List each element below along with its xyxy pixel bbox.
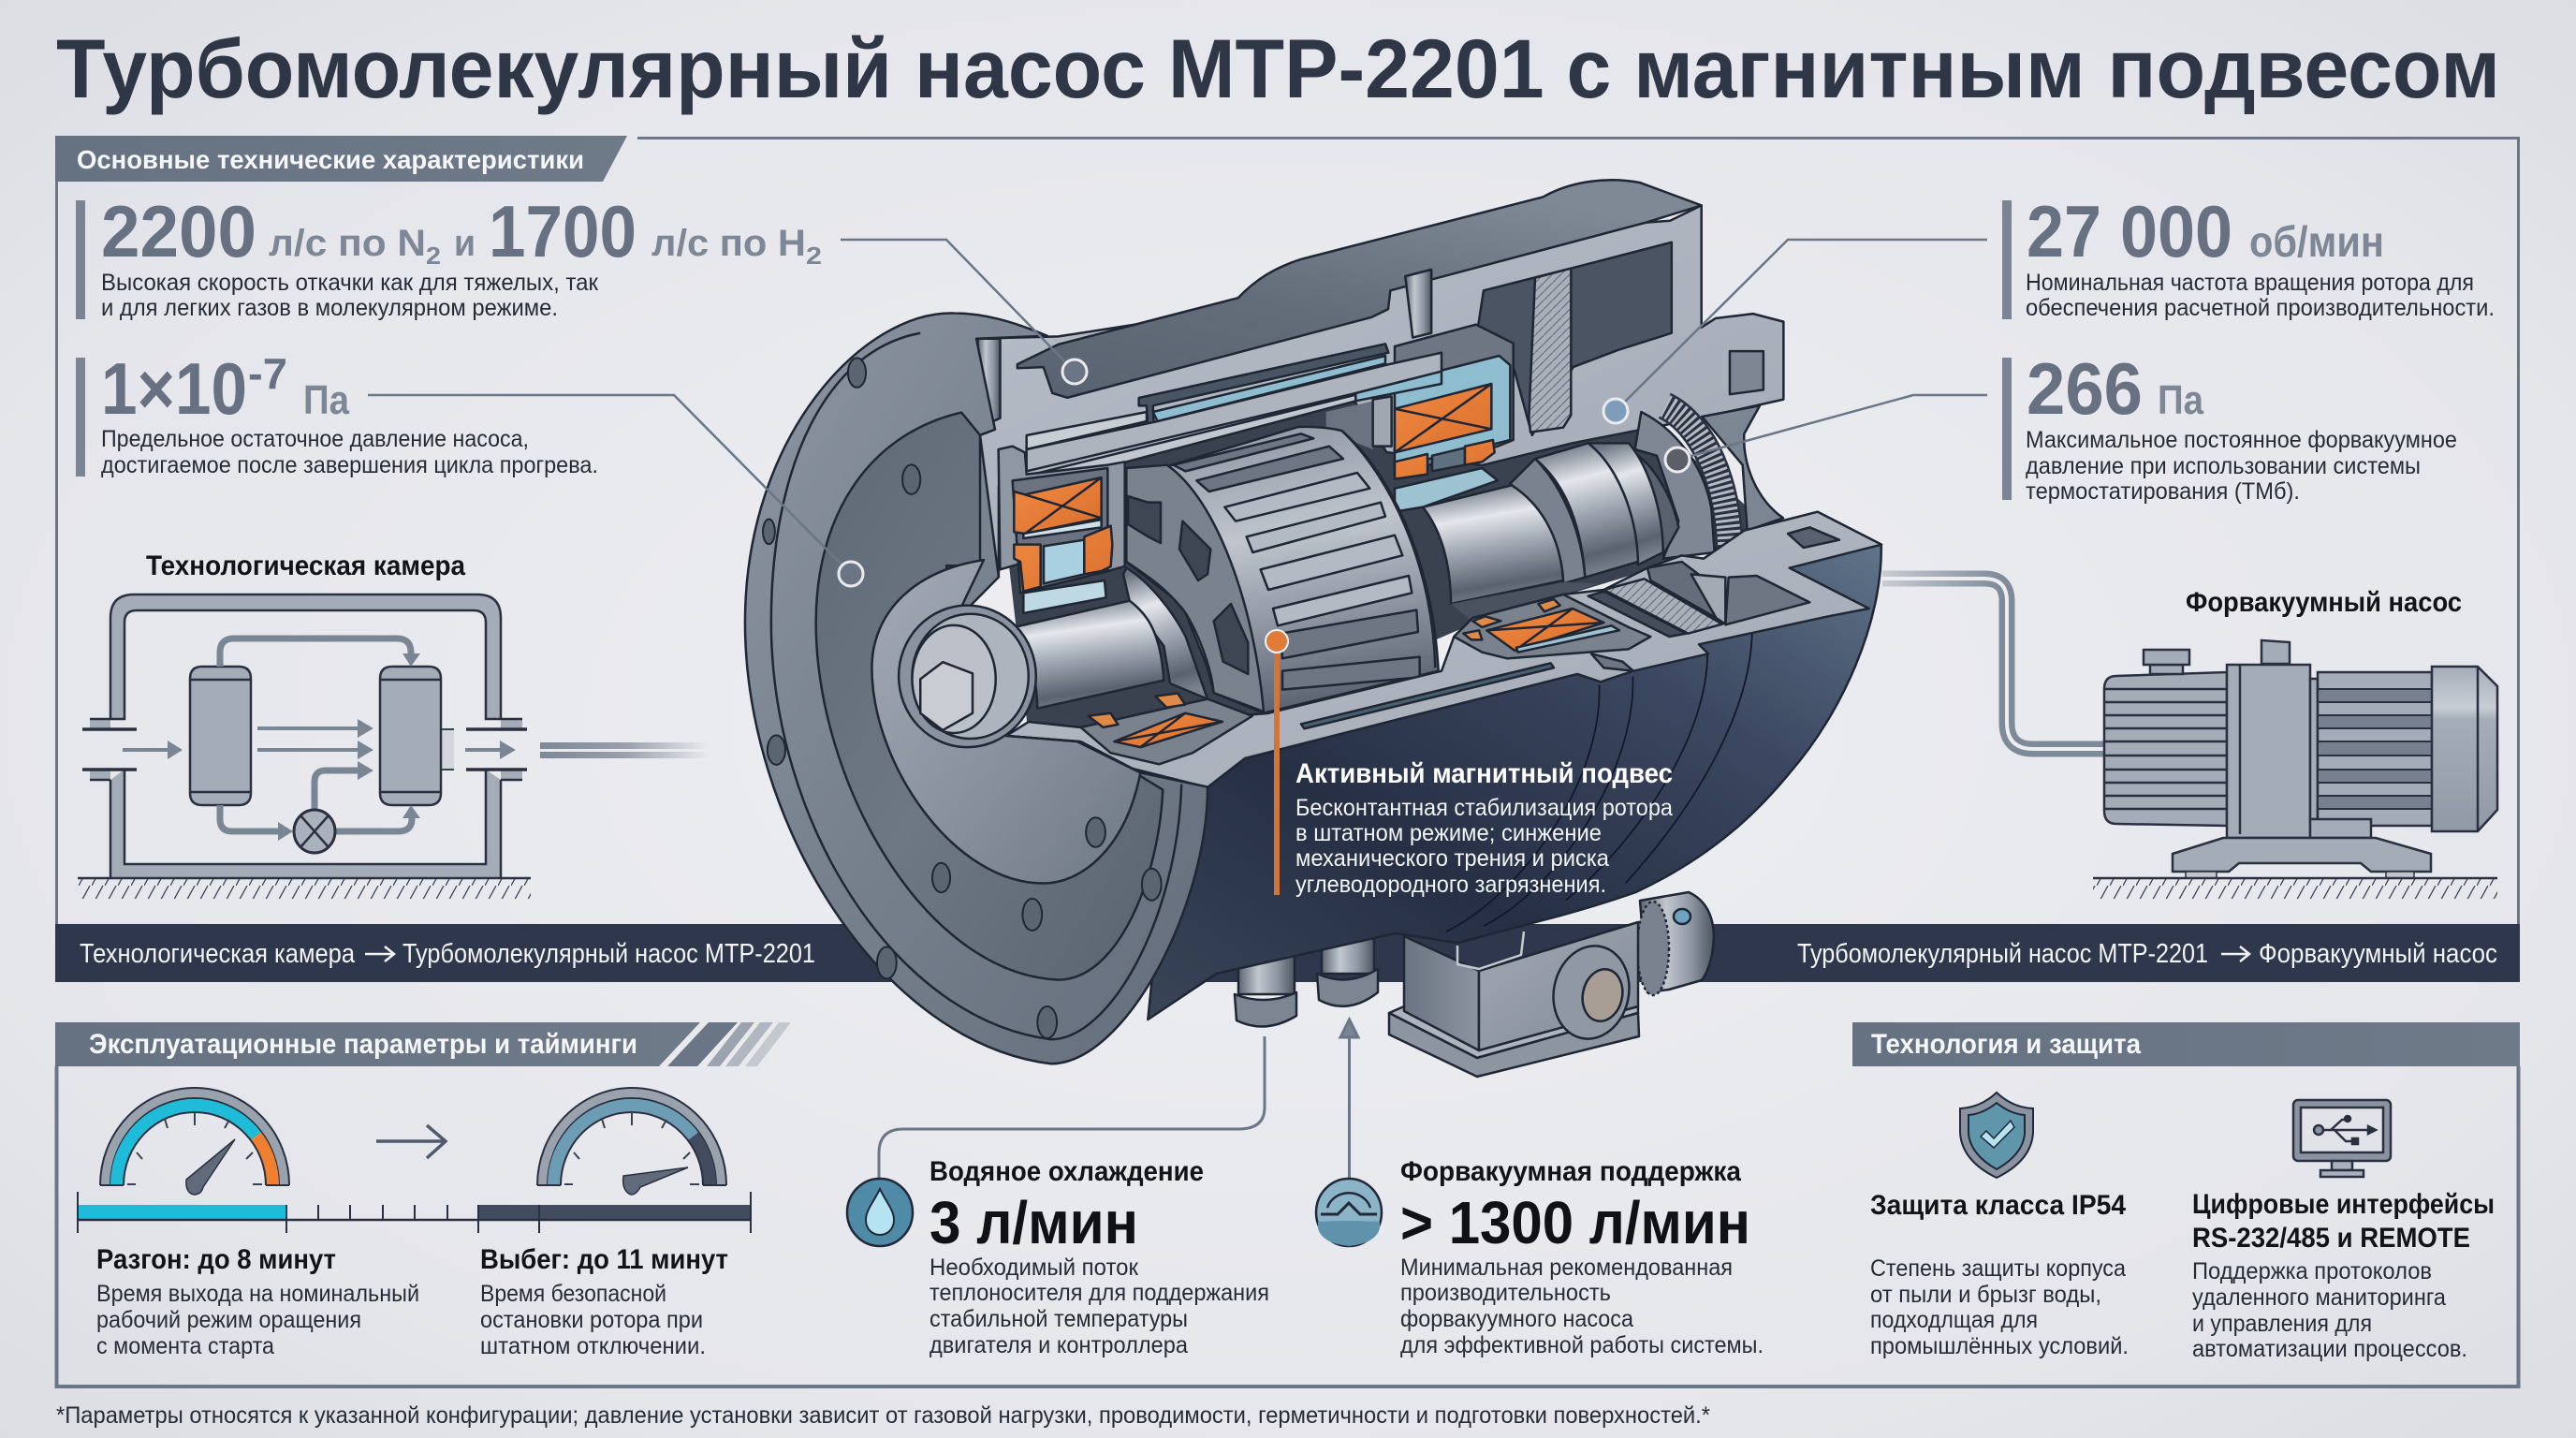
text: forevacuum support: для эффективной работы системы.: [1400, 1332, 1764, 1358]
callout: active magnetic bearing: углеводородного загрязнения.: [1295, 872, 1606, 898]
stat: foreline pressure: Па: [2158, 377, 2203, 423]
icon: water drop: [847, 1179, 913, 1246]
gauge: coast-down: [537, 1088, 726, 1195]
stat: pumping speed: 1700: [489, 190, 637, 272]
stat: ultimate pressure: [76, 347, 598, 478]
section cut: [946, 205, 1783, 606]
text: coast-down: штатном отключении.: [480, 1333, 706, 1359]
text: interfaces: Поддержка протоколов: [2192, 1258, 2432, 1284]
pipe: pump to forevacuum: [1882, 579, 2104, 749]
text: IP54: промышлённых условий.: [1870, 1333, 2129, 1359]
arrow: forevacuum: [1340, 1020, 1358, 1179]
stat: pumping speed: 2: [426, 242, 441, 270]
heading: technology and protection: Технология и защита: [1871, 1029, 2141, 1060]
callout: active magnetic bearing: в штатном режиме; синжение: [1295, 820, 1602, 846]
stat: rotation speed: об/мин: [2249, 217, 2384, 266]
stat: pumping speed: и: [454, 223, 476, 264]
text: IP54: подходлщая для: [1870, 1307, 2038, 1333]
text: interfaces: [2192, 1189, 2495, 1362]
rotor and front coil: [999, 344, 1442, 713]
stat: ultimate pressure: -7: [248, 349, 287, 398]
text: forevacuum support: форвакуумного насоса: [1400, 1306, 1633, 1332]
callout: active magnetic bearing: Активный магнитный подвес: [1295, 758, 1673, 789]
stat: pumping speed: [76, 190, 822, 321]
gauge: spin-up: [100, 1088, 289, 1195]
illustration: forevacuum pump: [2093, 640, 2497, 899]
lower plate and coil bays: [1006, 512, 1881, 787]
ground: [78, 878, 531, 899]
stat: rotation speed: 27 000: [2027, 190, 2232, 272]
icon: shield: [1960, 1093, 2033, 1178]
connector: water: [879, 1036, 1265, 1179]
callout: active magnetic bearing: [1266, 630, 1673, 898]
stat: ultimate pressure: Предельное остаточное давление насоса,: [101, 426, 529, 452]
heading: operating parameters: Эксплуатационные параметры и тайминги: [89, 1029, 637, 1060]
stat: pumping speed: Высокая скорость откачки как для тяжелых, так: [101, 270, 599, 296]
rear cavity: [1476, 242, 1672, 435]
panel: main frame: [56, 139, 2518, 925]
rear assembly: [1395, 269, 1783, 624]
stat: foreline pressure: 266: [2027, 347, 2143, 430]
text: interfaces: автоматизации процессов.: [2192, 1336, 2467, 1362]
text: water cooling: [929, 1156, 1269, 1358]
illustration: turbomolecular pump cutaway: [745, 180, 1881, 1077]
stat: rotation speed: [2002, 190, 2495, 321]
text: water cooling: стабильной температуры: [929, 1306, 1188, 1332]
heading: technical specs: Основные технические характеристики: [77, 145, 584, 174]
callout: active magnetic bearing: Бесконтантная стабилизация ротора: [1295, 795, 1673, 821]
interior: [999, 395, 1775, 736]
stat: rotation speed: Номинальная частота вращения ротора для: [2026, 270, 2474, 296]
text: water cooling: теплоносителя для поддержания: [929, 1280, 1269, 1306]
text: forevacuum support: Минимальная рекомендованная: [1400, 1255, 1733, 1281]
text: IP54: Степень защиты корпуса: [1870, 1255, 2126, 1282]
dark flow band: [55, 924, 2520, 982]
front shaft: [1123, 568, 1208, 699]
main body in pump coordinates: [946, 180, 1881, 1020]
front flange: [745, 313, 1208, 1064]
stat: foreline pressure: давление при использовании системы: [2026, 453, 2421, 479]
flow arrows: [123, 638, 502, 831]
text: IP54: от пыли и брызг воды,: [1870, 1282, 2101, 1308]
heading: forevacuum pump: Форвакуумный насос: [2186, 587, 2462, 618]
gear: [1664, 405, 1730, 550]
left coil housing: [999, 447, 1125, 593]
text: interfaces: удаленного маниторинга: [2192, 1284, 2446, 1311]
rear housing slot: [1730, 351, 1764, 394]
stat: foreline pressure: [2002, 347, 2457, 505]
heading: operating parameters: [55, 1022, 791, 1066]
stat: ultimate pressure: Па: [303, 377, 349, 423]
top surface and coolant cavity: [1017, 180, 1702, 398]
flow label left: [80, 939, 815, 969]
text: water cooling: двигателя и контроллера: [929, 1332, 1188, 1358]
vessels: [190, 667, 441, 805]
flow label right: Форвакуумный насос: [2259, 939, 2497, 969]
text: spin-up: с момента старта: [96, 1333, 274, 1359]
callout: active magnetic bearing: механического трения и риска: [1295, 845, 1609, 872]
rotor drum: [1126, 427, 1439, 713]
text: forevacuum support: > 1300 л/мин: [1400, 1189, 1750, 1256]
text: water cooling: Необходимый поток: [929, 1255, 1139, 1281]
text: forevacuum support: Форвакуумная поддержка: [1400, 1156, 1741, 1187]
text: spin-up: Время выхода на номинальный: [96, 1281, 419, 1307]
icon: vacuum gauge: [1316, 1179, 1382, 1246]
stat: ultimate pressure: достигаемое после завершения цикла прогрева.: [101, 452, 598, 478]
text: IP54: [1870, 1190, 2129, 1359]
text: coast-down: Время безопасной: [480, 1281, 666, 1307]
rear housing: [1702, 405, 1783, 531]
stat: ultimate pressure: 1×10: [101, 347, 247, 430]
valve: [294, 810, 335, 853]
heading: process chamber: Технологическая камера: [146, 550, 465, 581]
text: coast-down: Выбег: до 11 минут: [480, 1244, 728, 1275]
navy housing: [1148, 545, 1881, 1020]
leader lines: [368, 240, 1987, 574]
text: water cooling: Водяное охлаждение: [929, 1156, 1204, 1187]
front lower coil: [745, 313, 1252, 1064]
diagram: process chamber: [78, 594, 710, 899]
flange bolt holes: [763, 358, 1162, 1038]
flange pin: [978, 339, 1001, 424]
text: forevacuum support: производительность: [1400, 1280, 1611, 1306]
markers: [839, 360, 1690, 586]
flow label right: Турбомолекулярный насос МТР-2201: [1797, 939, 2208, 969]
title: Турбомолекулярный насос МТР-2201 с магнитным подвесом: [56, 22, 2500, 115]
heading: technical specs: [55, 136, 627, 182]
shaft end: [899, 606, 1036, 747]
text: interfaces: RS-232/485 и REMOTE: [2192, 1223, 2470, 1254]
stat: pumping speed: 2: [806, 242, 822, 270]
stat: pumping speed: и для легких газов в молекулярном режиме.: [101, 295, 558, 321]
flow label left: Технологическая камера: [80, 939, 356, 969]
text: IP54: Защита класса IP54: [1870, 1190, 2126, 1221]
footnote: *Параметры относятся к указанной конфигурации; давление установки зависит от газовой нагрузки, проводимости, герметичности и подготовки поверхностей.*: [56, 1402, 1710, 1429]
timeline: [78, 1192, 751, 1233]
text: coast-down: остановки ротора при: [480, 1307, 703, 1333]
text: coast-down: [480, 1244, 728, 1359]
stat: pumping speed: 2200: [101, 190, 256, 272]
text: spin-up: рабочий режим оращения: [96, 1307, 361, 1333]
stat: pumping speed: л/с по N: [269, 223, 426, 264]
panel: bottom frame: [56, 1066, 2518, 1387]
arrow: [376, 1125, 446, 1158]
text: forevacuum support: [1400, 1156, 1764, 1358]
stat: pumping speed: л/с по H: [651, 223, 806, 264]
stat: rotation speed: обеспечения расчетной производительности.: [2026, 295, 2495, 321]
text: spin-up: [96, 1244, 419, 1359]
stat: foreline pressure: термостатирования (ТМб).: [2026, 478, 2300, 505]
flow label left: Турбомолекулярный насос МТР-2201: [402, 939, 815, 969]
flow label right: [1797, 939, 2497, 969]
text: water cooling: 3 л/мин: [929, 1189, 1138, 1256]
heading: technology and protection: [1852, 1022, 2520, 1066]
valve block and connectors: [1235, 892, 1714, 1077]
text: spin-up: Разгон: до 8 минут: [96, 1244, 336, 1275]
text: interfaces: Цифровые интерфейсы: [2192, 1189, 2495, 1220]
text: interfaces: и управления для: [2192, 1311, 2372, 1337]
rear pin: [1405, 270, 1431, 338]
stat: foreline pressure: Максимальное постоянное форвакуумное: [2026, 427, 2457, 453]
icon: usb monitor: [2293, 1100, 2391, 1177]
